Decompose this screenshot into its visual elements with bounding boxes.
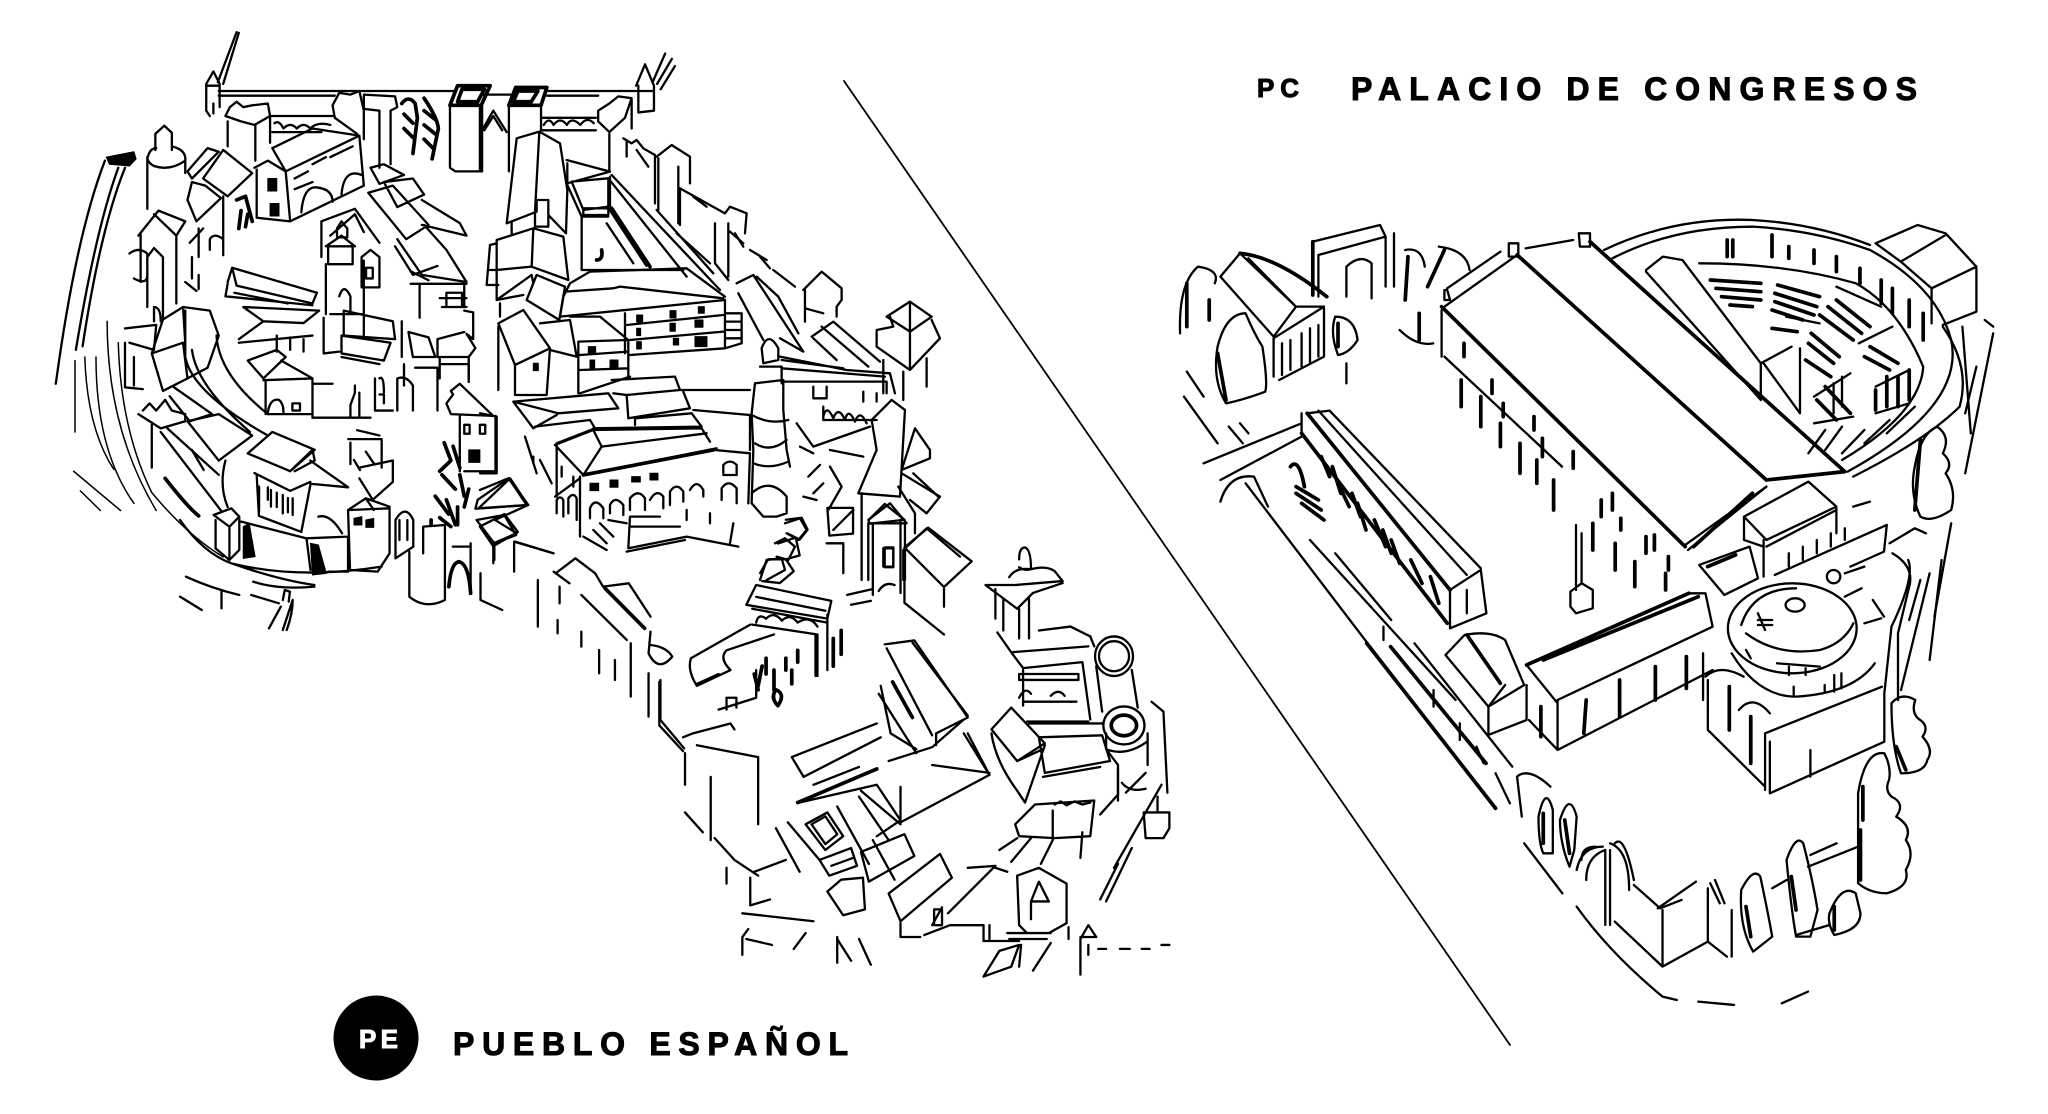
castle walls, towers and west quarter <box>56 32 675 557</box>
label: Pueblo Español <box>334 996 848 1080</box>
badge: PE: PE <box>359 1024 398 1054</box>
north: gate, temple, main hall and amphitheatre <box>1180 220 1993 700</box>
badge: PE <box>334 996 418 1080</box>
title: Pueblo Español: PUEBLO ESPAÑOL <box>453 1026 848 1062</box>
divider line <box>844 81 1510 1045</box>
southern wall, gate and road curves <box>180 450 684 748</box>
illustration: Pueblo Español aerial sketch <box>56 32 1169 977</box>
castle east quarter and central plaza <box>480 132 960 580</box>
code: PC: PC <box>1257 73 1299 103</box>
southeastern buildings <box>659 504 1169 977</box>
title: Palacio de Congresos: PALACIO DE CONGRESOS <box>1351 71 1917 107</box>
label: Palacio de Congresos <box>1257 71 1917 107</box>
south: long building, dome, wall and cypresses <box>1367 560 1942 1005</box>
illustration: Palacio de Congresos aerial sketch <box>1180 220 1993 1005</box>
